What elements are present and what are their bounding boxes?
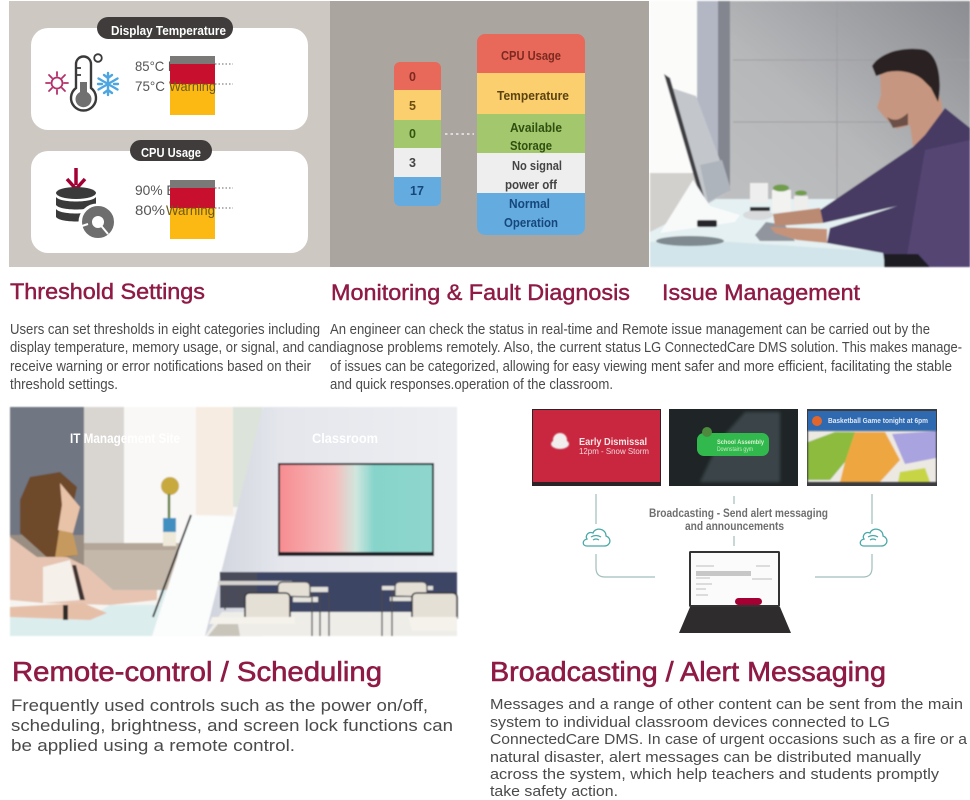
connector lines — [596, 494, 872, 577]
caption: broadcasting: Broadcasting - Send alert messaging — [649, 508, 828, 520]
status count column — [394, 62, 441, 206]
photo: IT manager and classroom — [10, 407, 457, 636]
icon: database with arrow and gauge — [56, 168, 116, 240]
text: threshold settings description: Users can set thresholds in eight categories including — [10, 322, 320, 338]
CPU threshold color block — [170, 180, 215, 239]
text: remote-control description: be applied using a remote control. — [11, 737, 295, 755]
text: monitoring description: diagnose problems remotely. Also, the current status — [329, 340, 641, 356]
screen: early dismissal: 12pm - Snow Storm — [579, 446, 649, 456]
screen: basketball game: Basketball Game tonight at 6pm — [828, 418, 928, 425]
icon: left cloud wifi — [583, 529, 610, 546]
laptop with alert console — [679, 551, 791, 633]
status legend column: Available — [510, 121, 562, 135]
heading: broadcasting and alert messaging: Broadcasting / Alert Messaging — [490, 656, 886, 687]
status count column: 3 — [409, 156, 416, 170]
label: IT management: IT Management Site — [70, 431, 180, 446]
text: monitoring description: and quick responses.operation of the classroom. — [330, 377, 613, 393]
pill: display temperature — [97, 17, 233, 39]
label: classroom: Classroom — [312, 431, 378, 446]
screen: early dismissal: Early Dismissal — [579, 437, 647, 448]
CPU error value: 90% Error — [135, 182, 197, 198]
classroom display — [278, 463, 434, 556]
card: display temperature — [31, 17, 308, 130]
status legend column: Operation — [504, 216, 558, 230]
icon: thermometer — [71, 54, 102, 111]
text: monitoring description — [329, 322, 647, 393]
CPU warning value: 80% — [135, 202, 165, 218]
text: remote-control description: scheduling, brightness, and screen lock functions can — [11, 717, 453, 735]
warning label over block: Warning — [169, 78, 216, 94]
status legend column: CPU Usage — [501, 49, 561, 63]
text: monitoring description: An engineer can check the status in real-time and — [330, 322, 618, 338]
status count column: 17 — [410, 184, 424, 198]
status legend column: Storage — [510, 139, 552, 153]
panel: monitoring and fault diagnosis — [330, 1, 649, 267]
icon: sun — [46, 72, 68, 94]
connector dots — [445, 133, 474, 135]
text: broadcasting description: system to individual classroom devices connected to LG — [490, 714, 890, 731]
temperature error value: 85°C Error — [135, 58, 197, 74]
text: threshold settings description — [10, 322, 329, 393]
screen: early dismissal — [532, 409, 661, 486]
text: broadcasting description: ConnectedCare DMS. In case of urgent occasions such as a fire or a — [490, 731, 968, 748]
status legend column — [477, 34, 585, 235]
screen: school assembly: Downstairs gym — [717, 447, 753, 453]
CPU warning label over block: Warning — [166, 202, 215, 218]
threshold color block — [170, 56, 215, 115]
heading: remote-control and scheduling: Remote-control / Scheduling — [12, 656, 382, 687]
screen: school assembly — [669, 409, 798, 486]
card: CPU usage — [31, 140, 308, 253]
heading: threshold settings: Threshold Settings — [10, 279, 205, 304]
text: threshold settings description: display temperature, memory usage, or signal, and can — [10, 340, 329, 356]
photo: engineer at desk — [650, 1, 970, 267]
status count column: 0 — [409, 70, 416, 84]
text: threshold settings description: receive warning or error notifications based on their — [10, 359, 311, 375]
text: issue management description: ment safer and more efficient, facilitating the stable — [651, 359, 952, 375]
text: broadcasting description: across the system, which help teachers and students promptly — [490, 766, 940, 783]
text: broadcasting description — [490, 696, 968, 800]
pill: display temperature: Display Temperature — [111, 24, 226, 38]
text: monitoring description: of issues can be categorized, allowing for easy viewing — [330, 359, 647, 375]
screen: basketball game — [807, 409, 937, 486]
status count column: 5 — [409, 99, 416, 113]
status legend column: No signal — [512, 159, 562, 173]
icon: right cloud wifi — [860, 529, 887, 546]
status legend column: Normal — [509, 197, 550, 211]
status legend column: power off — [505, 178, 558, 192]
pill: CPU usage — [130, 140, 212, 161]
panel: threshold settings — [9, 1, 330, 267]
caption: broadcasting: and announcements — [685, 521, 784, 533]
caption: broadcasting — [649, 508, 828, 533]
pill: CPU usage: CPU Usage — [141, 146, 201, 160]
icon: snowflake — [98, 73, 118, 95]
status legend column: Temperature — [497, 89, 569, 103]
text: remote-control description: Frequently used controls such as the power on/off, — [11, 697, 428, 715]
text: broadcasting description: Messages and a range of other content can be sent from the main — [490, 696, 963, 713]
text: broadcasting description: take safety action. — [490, 783, 618, 800]
text: issue management description: Remote issue management can be carried out by the — [622, 322, 930, 338]
text: threshold settings description: threshold settings. — [10, 377, 118, 393]
screen: school assembly: School Assembly — [717, 439, 764, 446]
diagram: broadcasting flow — [532, 409, 937, 633]
heading: issue management: Issue Management — [662, 280, 860, 305]
text: remote-control description — [11, 697, 453, 755]
heading: monitoring and fault diagnosis: Monitoring & Fault Diagnosis — [331, 280, 630, 305]
text: broadcasting description: natural disaster, alert messages can be distributed manually — [490, 749, 922, 766]
status count column: 0 — [409, 127, 416, 141]
text: issue management description — [622, 322, 962, 375]
temperature warning value: 75°C — [135, 78, 165, 94]
